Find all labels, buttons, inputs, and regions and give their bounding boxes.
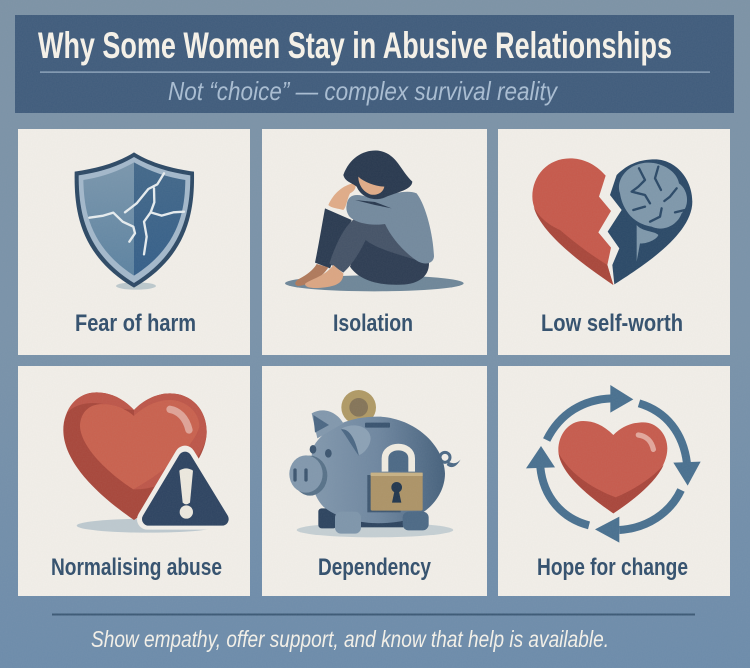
- cycle arrows: [526, 385, 701, 543]
- panel: normalising abuse: [18, 366, 250, 596]
- panel: low self-worth: [498, 129, 730, 355]
- panel: fear of harm: [18, 129, 250, 355]
- label: Fear of harm: [75, 310, 196, 337]
- icon: heart with warning triangle: [63, 392, 224, 533]
- panel: hope for change: [498, 366, 730, 596]
- label: Low self-worth: [541, 310, 683, 337]
- footer message: Show empathy, offer support, and know that help is available.: [91, 626, 609, 652]
- label: Normalising abuse: [51, 554, 222, 581]
- label: Dependency: [318, 554, 432, 581]
- icon: seated figure: [285, 151, 464, 291]
- header banner: [15, 15, 734, 113]
- icon: broken heart with brain: [532, 158, 692, 285]
- panel: isolation: [262, 129, 487, 355]
- label: Isolation: [333, 310, 413, 337]
- subtitle: Not “choice” — complex survival reality: [168, 76, 559, 106]
- label: Hope for change: [537, 554, 688, 581]
- icon: locked piggy bank: [289, 390, 461, 537]
- panel: dependency: [262, 366, 487, 596]
- icon: cracked shield: [75, 152, 194, 290]
- heart: [558, 421, 667, 513]
- icon: heart in cycle arrows: [526, 385, 701, 543]
